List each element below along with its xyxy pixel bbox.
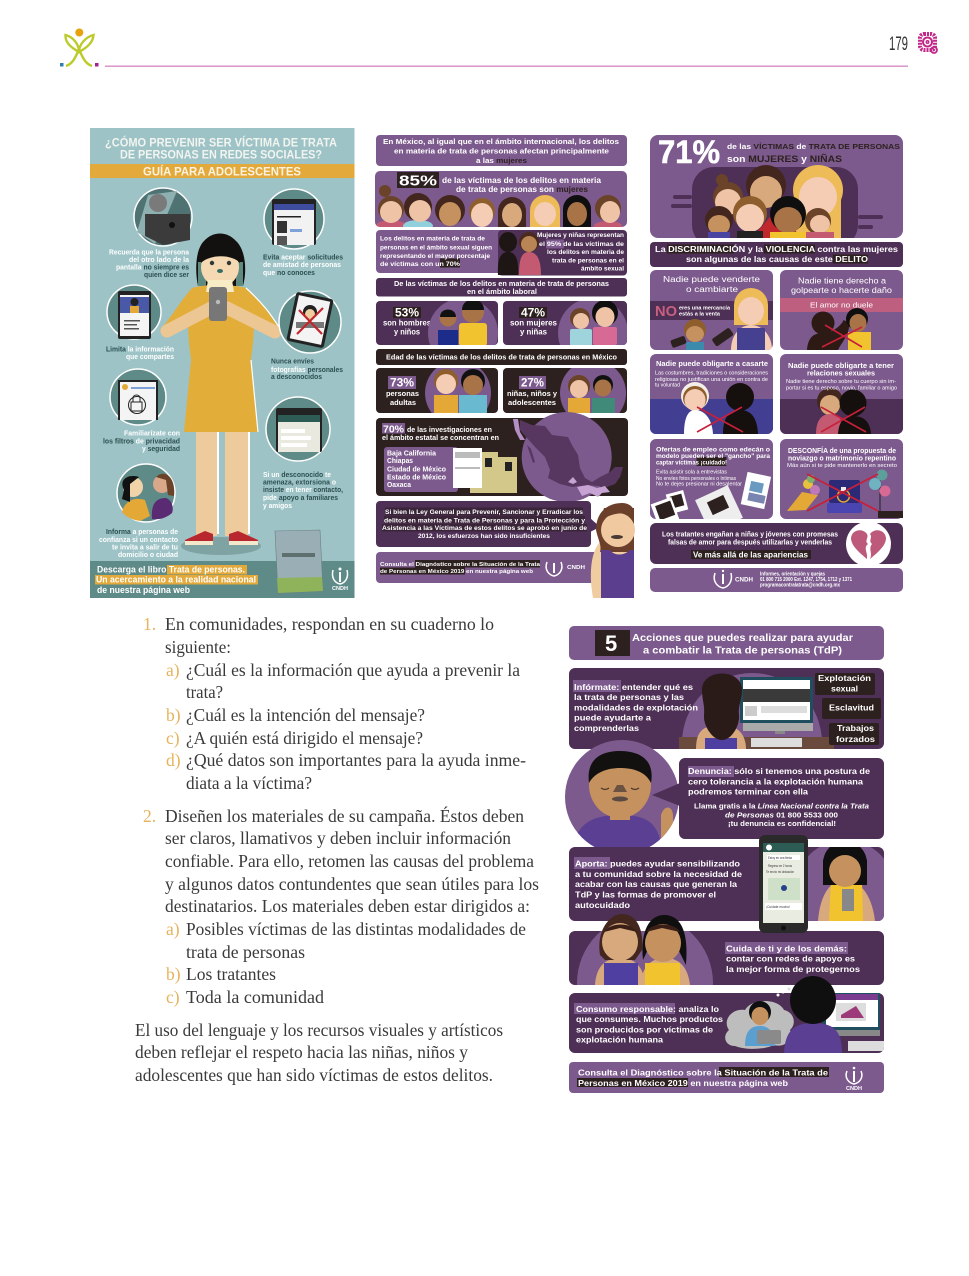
action: infórmate: la trata de personas y las	[574, 693, 685, 702]
illustration: phone with messages: Estoy en una fiesta	[768, 855, 793, 860]
activities text: ¿Qué datos son importantes para la ayuda inme-	[186, 750, 526, 770]
activities text: c)	[166, 728, 180, 748]
text: recuerda: quien dice ser	[144, 272, 189, 279]
card: ofertas de empleo: No te dejes presionar ni desalentar	[656, 482, 742, 488]
stat: 70% investigations: de las investigaciones en	[407, 427, 492, 434]
stat: 27%: niñas, niños y	[507, 391, 557, 398]
red cross	[822, 325, 862, 347]
label: explotación sexual	[815, 673, 875, 695]
title	[105, 134, 337, 162]
stat: 71%: 71%	[658, 134, 720, 170]
page number: 179	[889, 34, 908, 55]
card: nadie tiene derecho: El amor no duele	[810, 302, 873, 310]
icon: chat phone	[266, 397, 330, 461]
activities text: trata de personas	[186, 942, 305, 962]
illustration: woman speaking	[591, 503, 635, 598]
icon: book cover	[275, 530, 323, 593]
stat: 70% sexual: personas en el ámbito sexual siguen	[380, 246, 492, 252]
text: desconocido: insiste en tener contacto,	[263, 487, 343, 494]
header rule	[105, 66, 908, 67]
card: ofertas de empleo: captar víctimas ¡cuidado!	[656, 460, 727, 466]
activities text	[135, 614, 539, 1085]
action: aporta: autocuidado	[575, 901, 630, 910]
intro box	[376, 135, 627, 166]
stat: 85% women: de trata de personas son mujeres	[456, 185, 589, 194]
stat: 71%: son MUJERES y NIÑAS	[727, 154, 842, 164]
footer band: descarga el libro: Descarga el libro Trata de personas.	[97, 564, 245, 574]
illustration: man speaking	[565, 740, 678, 847]
panel: 71% mujeres y niñas	[650, 134, 903, 592]
card: desconfía	[780, 439, 903, 519]
stat: 73%: adultas	[390, 400, 416, 407]
text: nunca envíes: Nunca envíes	[271, 358, 314, 366]
stat: 53%	[376, 301, 498, 345]
illustration: two friends	[595, 914, 690, 985]
consulta footer: CNDH	[846, 1086, 862, 1092]
stat: 95% women and girls: los delitos en materia de	[547, 250, 625, 256]
stat: 27%	[503, 368, 627, 413]
icon: spiral glyph	[920, 34, 937, 53]
activities text: En comunidades, respondan en su cuaderno lo	[165, 614, 494, 634]
card: relaciones sexuales: Nadie tiene derecho sobre tu cuerpo sin im-	[786, 379, 896, 385]
stat: 70% investigations: el ámbito estatal se concentran en	[382, 435, 499, 442]
icon: friend request phone	[264, 189, 324, 249]
action: infórmate: Infórmate: entender qué es	[574, 683, 694, 692]
red cross	[821, 407, 866, 432]
activities text: siguiente:	[165, 637, 231, 657]
text: limita: Limita la información	[106, 346, 174, 354]
card: nadie tiene derecho: golpearte o hacerte daño	[791, 286, 893, 295]
stat: 70% sexual: representando el mayor porcentaje	[380, 254, 491, 260]
card: nadie puede venderte: estás a la venta	[679, 312, 720, 318]
red cross	[807, 474, 878, 511]
label: esclavitud	[822, 698, 881, 719]
stat: 95% women and girls: trata de personas en el	[552, 258, 624, 264]
illustration: phone with messages: Te envío mi ubicación	[766, 869, 794, 874]
label: trabajos forzados	[829, 723, 879, 745]
text: informa: Informa a personas de	[106, 529, 178, 536]
activities text: ser claros, llamativos y deben incluir información	[165, 828, 511, 848]
action: aporta	[569, 847, 884, 921]
consulta footer: Personas en México 2019 en nuestra página web	[578, 1079, 788, 1088]
activities text: 1.	[143, 614, 156, 634]
panel: estadísticas México	[375, 135, 635, 598]
text: familiarízate	[103, 430, 180, 453]
illustration: phone with messages: Regreso en 2 horas	[768, 863, 792, 868]
stat: 47%	[503, 301, 627, 345]
illustration: eight faces	[376, 185, 622, 227]
list of states: Oaxaca	[387, 482, 411, 489]
text: desconocido: Si un desconocido te	[263, 472, 331, 479]
text: nunca envíes: a desconocidos	[271, 374, 322, 381]
heading: ámbito laboral	[376, 278, 627, 296]
activities text: trata?	[186, 682, 223, 702]
consulta footer: Consulta el Diagnóstico sobre la Situación de la Trata	[380, 562, 540, 568]
heading: Acciones que puedes realizar para ayudar	[632, 633, 853, 644]
footer: informes CNDH: 01 800 715 2000 Ext. 1247, 1754, 1712 y 1371	[760, 577, 852, 583]
title: ¿CÓMO PREVENIR SER VÍCTIMA DE TRATA	[105, 134, 337, 150]
action: aporta: acabar con las causas que generan la	[575, 880, 738, 889]
icon: two friends talking	[117, 464, 175, 522]
activities text: y algunos datos contundentes que sean útiles para los	[165, 874, 539, 894]
heading: ámbito laboral: en el ámbito laboral	[467, 289, 537, 296]
card: casarte: tu voluntad	[655, 382, 680, 388]
activities text: confiable. Para ello, retomen las causas del problema	[165, 851, 534, 871]
panel: guía para adolescentes	[90, 128, 354, 598]
illustration: phone with messages	[759, 835, 808, 933]
list of states: Chiapas	[387, 458, 413, 465]
stat: 47%: son mujeres	[510, 318, 558, 328]
action: infórmate: comprenderlas	[574, 724, 640, 733]
action: infórmate: modalidades de explotación	[574, 704, 698, 712]
stat: 53%: son hombres	[383, 318, 432, 328]
card: nadie puede venderte: o cambiarte	[686, 285, 739, 294]
card: ofertas de empleo: No envíes fotos personales o íntimas	[656, 476, 736, 482]
label: explotación sexual: sexual	[831, 684, 858, 694]
stat: 73%: personas	[386, 391, 419, 398]
footer band: descarga el libro: Un acercamiento a la realidad nacional	[96, 574, 256, 584]
action: denuncia	[652, 758, 884, 839]
action: denuncia: Denuncia: sólo si tenemos una postura de	[688, 767, 871, 776]
text: familiarízate: Familiarízate con	[124, 430, 180, 438]
stat: 70% investigations	[376, 412, 628, 502]
card: nadie puede venderte: NO	[655, 303, 677, 320]
text: evita: que no conoces	[263, 270, 315, 277]
consulta footer	[569, 1062, 884, 1093]
card: desconfía: noviazgo o matrimonio repentino	[788, 456, 896, 462]
card: nadie tiene derecho	[780, 270, 903, 350]
action: denuncia: Llama gratis a la Línea Nacional contra la Trata	[694, 804, 869, 810]
stat: 27%: adolescentes	[508, 400, 556, 407]
text: evita: de amistad de personas	[263, 262, 341, 269]
heading	[569, 626, 884, 660]
action: consumo responsable: que consumes. Muchos productos	[576, 1015, 724, 1024]
consulta footer: Consulta el Diagnóstico sobre la Situación de la Trata de	[578, 1068, 829, 1078]
text: informa: confianza si un contacto	[99, 537, 178, 544]
card: desconfía: Más aún si te pide mantenerlo en secreto	[787, 463, 897, 469]
panel: 5 acciones	[565, 626, 895, 1093]
heading: edad	[376, 349, 627, 365]
activities text: ¿A quién está dirigido el mensaje?	[186, 728, 423, 748]
text: nunca envíes: fotografías personales	[271, 367, 343, 374]
intro box: a las mujeres	[476, 158, 527, 165]
balloons	[869, 470, 903, 518]
action: infórmate	[569, 668, 884, 749]
icon: crossed photo phone	[279, 291, 341, 353]
card: nadie puede venderte	[650, 270, 773, 350]
logo: CNDH	[332, 568, 348, 592]
action: denuncia: ¡tu denuncia es confidencial!	[728, 821, 836, 828]
map of Mexico	[513, 412, 623, 502]
footer band: descarga el libro	[90, 561, 354, 598]
icon: person behind screen	[134, 188, 192, 246]
footer: informes CNDH	[650, 568, 903, 592]
activities text: El uso del lenguaje y los recursos visuales y artísticos	[135, 1020, 503, 1040]
text: limita	[106, 346, 174, 361]
illustration: thought cloud and boy	[725, 976, 842, 1053]
activities text: b)	[166, 964, 181, 984]
footer band: descarga el libro: de nuestra página web	[97, 585, 190, 595]
action: infórmate: puede ayudarte a	[574, 714, 652, 722]
callout: ley general: Asistencia a las Víctimas de estos delitos se aprobó en junio de	[382, 526, 588, 532]
stat: 70% sexual: Los delitos en materia de trata de	[380, 236, 486, 242]
stat: 85% women: 85%	[399, 172, 437, 190]
card: ofertas de empleo: Evita asistir sola a entrevistas	[656, 470, 728, 476]
list of states: Estado de México	[387, 474, 446, 482]
label: trabajos forzados: Trabajos	[837, 724, 875, 733]
text: desconocido: amenaza, extorsiona o	[263, 480, 336, 486]
consulta footer: CNDH	[567, 565, 585, 571]
card: relaciones sexuales: portar si es tu esposo, novio, familiar o amigo	[786, 386, 897, 392]
text: nunca envíes	[271, 358, 343, 381]
action: cuida de ti: contar con redes de apoyo es	[726, 954, 856, 964]
stat: 70% sexual	[376, 230, 506, 273]
banner: tratantes	[650, 522, 903, 566]
action: denuncia: cero tolerancia a la explotación humana	[688, 778, 864, 786]
activities text: d)	[166, 750, 181, 770]
list of states: Ciudad de México	[387, 466, 446, 474]
card: nadie tiene derecho: Nadie tiene derecho a	[798, 276, 887, 286]
header logo	[60, 28, 98, 66]
action: denuncia: de Personas 01 800 5533 000	[725, 812, 838, 820]
activities text: a)	[166, 660, 180, 680]
text: evita: Evita aceptar solicitudes	[263, 254, 343, 262]
footer: informes CNDH: programacontralatrata@cndh.org.mx	[760, 582, 840, 588]
stat: 95% women and girls	[498, 230, 627, 276]
activities text: deben reflejar el respeto hacia las niñas, niños y	[135, 1042, 468, 1062]
stat: 47%: 47%	[521, 308, 545, 320]
activities text: ¿Cuál es la intención del mensaje?	[186, 705, 425, 725]
action: denuncia: podremos terminar con ella	[688, 788, 809, 796]
icon: case files	[453, 448, 517, 493]
card: casarte: religiosas no justifican una unión en contra de	[655, 377, 768, 383]
action: aporta: a tu comunidad sobre la necesidad de	[575, 870, 743, 879]
heading: 5	[605, 631, 617, 656]
text: informa	[99, 529, 178, 559]
red cross	[697, 407, 743, 432]
action: consumo responsable: son producidos por víctimas de	[576, 1026, 714, 1034]
text: recuerda: pantalla no siempre es	[116, 264, 189, 272]
consulta footer	[376, 552, 600, 583]
activities text: a)	[166, 919, 180, 939]
action: cuida de ti: la mejor forma de protegernos	[726, 965, 861, 974]
stat: 53%: y niños	[394, 328, 421, 336]
photos and job ads	[650, 472, 771, 519]
banner: tratantes: Los tratantes engañan a niñas y jóvenes con promesas	[662, 532, 838, 538]
activities text: b)	[166, 705, 181, 725]
callout: ley general: delitos en materia de Trata de Personas y para la Protección y	[384, 518, 586, 524]
stat: 27%: 27%	[521, 376, 544, 390]
stat: 73%: 73%	[390, 376, 414, 390]
label: trabajos forzados: forzados	[836, 735, 876, 744]
action: consumo responsable: Consumo responsable: analiza lo	[576, 1005, 719, 1014]
icon: profile phone	[107, 285, 161, 339]
activities text: diata a la víctima?	[186, 773, 312, 793]
stat: 47%: y niñas	[520, 328, 548, 336]
subtitle band	[90, 164, 354, 178]
action: aporta: Aporta: puedes ayudar sensibilizando	[575, 860, 740, 868]
card: desconfía: DESCONFÍA de una propuesta de	[788, 446, 896, 455]
text: evita	[263, 254, 343, 277]
stat: 73%	[376, 368, 498, 413]
text: desconocido: pide apoyo a familiares	[263, 495, 338, 502]
banner: discriminación	[650, 242, 903, 267]
action: aporta: TdP y las formas de promover el	[575, 890, 716, 900]
card: casarte	[650, 354, 773, 434]
callout: ley general: Si bien la Ley General para Prevenir, Sancionar y Erradicar los	[385, 510, 584, 516]
card: relaciones sexuales	[780, 354, 903, 434]
label: explotación sexual: Explotación	[818, 674, 871, 683]
stat: 53%: 53%	[395, 308, 419, 320]
action: consumo responsable: explotación humana	[576, 1036, 664, 1044]
list of states: Baja California	[387, 450, 436, 458]
intro box: En México, al igual que en el ámbito internacional, los delitos	[383, 139, 619, 146]
illustration: phone with messages: ¡Cuídate mucho!	[766, 904, 790, 909]
stat: 85% women	[375, 171, 627, 232]
label: esclavitud: Esclavitud	[829, 704, 874, 712]
logo: CNDH: CNDH	[332, 586, 348, 592]
consulta footer: de Personas en México 2019 en nuestra página web	[380, 569, 533, 575]
text: familiarízate: los filtros de privacidad	[103, 438, 180, 446]
text: informa: domicilio o ciudad	[118, 552, 178, 559]
card: ofertas de empleo: modelo pueden ser el "gancho" para	[656, 454, 771, 460]
list of states	[384, 447, 458, 492]
card: casarte: Nadie puede obligarte a casarte	[656, 361, 768, 368]
text: recuerda: del otro lado de la	[129, 257, 189, 264]
action: cuida de ti: Cuida de ti y de los demás:	[726, 944, 847, 954]
card: casarte: Las costumbres, tradiciones o consideraciones	[655, 370, 769, 376]
heading: ámbito laboral: De las víctimas de los delitos en materia de trata de personas	[394, 281, 609, 288]
activities text: Diseñen los materiales de su campaña. Éstos deben	[165, 806, 524, 826]
activities text: Toda la comunidad	[186, 987, 324, 1007]
text: recuerda	[109, 250, 189, 279]
card: nadie puede venderte: Nadie puede venderte	[663, 275, 761, 284]
banner: tratantes: falsas de amor para después utilizarlas y venderlas	[668, 540, 832, 546]
icon: privacy lock phone	[110, 369, 166, 425]
stat: 71%	[650, 134, 903, 247]
heading: a combatir la Trata de personas (TdP)	[643, 646, 842, 656]
activities text: Posibles víctimas de las distintas modalidades de	[186, 919, 526, 939]
stat: 95% women and girls: el 95% de las víctimas de	[539, 242, 625, 248]
activities text: adolescentes que han sido víctimas de estos delitos.	[135, 1065, 493, 1085]
ring box	[827, 480, 862, 513]
illustration: girl with phone	[161, 234, 281, 555]
callout: ley general: 2012, los esfuerzos han sido insuficientes	[418, 534, 551, 540]
card: ofertas de empleo	[650, 439, 773, 519]
activities text: ¿Cuál es la información que ayuda a prevenir la	[186, 660, 520, 680]
stat: 70% sexual: de víctimas con un 70%	[380, 262, 461, 268]
text: desconocido	[263, 472, 343, 510]
activities text: Los tratantes	[186, 964, 276, 984]
activities text: 2.	[143, 806, 156, 826]
stat: 71%: de las VÍCTIMAS de TRATA DE PERSONAS	[727, 142, 900, 151]
illustration: group of women	[671, 165, 883, 238]
footer: informes CNDH: Informes, orientación y quejas	[760, 572, 825, 578]
footer: informes CNDH: CNDH	[735, 578, 753, 584]
text: limita: que compartes	[126, 354, 174, 361]
stat: 70% investigations: 70%	[383, 424, 405, 436]
card: relaciones sexuales: Nadie puede obligarte a tener	[788, 363, 894, 370]
bouquet	[787, 475, 820, 511]
title: DE PERSONAS EN REDES SOCIALES?	[120, 148, 322, 162]
subtitle band: GUÍA PARA ADOLESCENTES	[143, 164, 301, 178]
stat: 95% women and girls: Mujeres y niñas representan	[537, 233, 624, 239]
icon: broken heart	[846, 522, 891, 566]
card: ofertas de empleo: Ofertas de empleo como edecán o	[656, 448, 770, 454]
banner: discriminación: La DISCRIMINACIÓN y la VIOLENCIA contra las mujeres	[655, 245, 899, 254]
card: relaciones sexuales: relaciones sexuales	[807, 370, 875, 378]
banner: tratantes: Ve más allá de las apariencias	[693, 550, 809, 560]
text: recuerda: Recuerda que la persona	[109, 250, 189, 256]
banner: discriminación: son algunas de las causas de este DELITO	[686, 255, 868, 264]
activities text: c)	[166, 987, 180, 1007]
text: familiarízate: y seguridad	[142, 446, 180, 453]
heading: edad: Edad de las víctimas de los delitos de trata de personas en México	[386, 354, 617, 362]
activities text: destinatarios. Los materiales deben estar dirigidos a:	[165, 896, 530, 916]
callout: ley general	[376, 501, 600, 547]
text: informa: te invita a salir de tu	[112, 544, 178, 552]
intro box: en materia de trata de personas afectan principalmente	[394, 148, 609, 156]
action: cuida de ti	[569, 931, 884, 985]
text: desconocido: y amigos	[263, 503, 292, 510]
card: nadie puede venderte: eres una mercancía	[679, 306, 730, 312]
action: consumo responsable	[569, 992, 884, 1053]
stat: 85% women: de las víctimas de los delitos en materia	[442, 176, 602, 185]
stat: 95% women and girls: ámbito sexual	[581, 266, 624, 272]
